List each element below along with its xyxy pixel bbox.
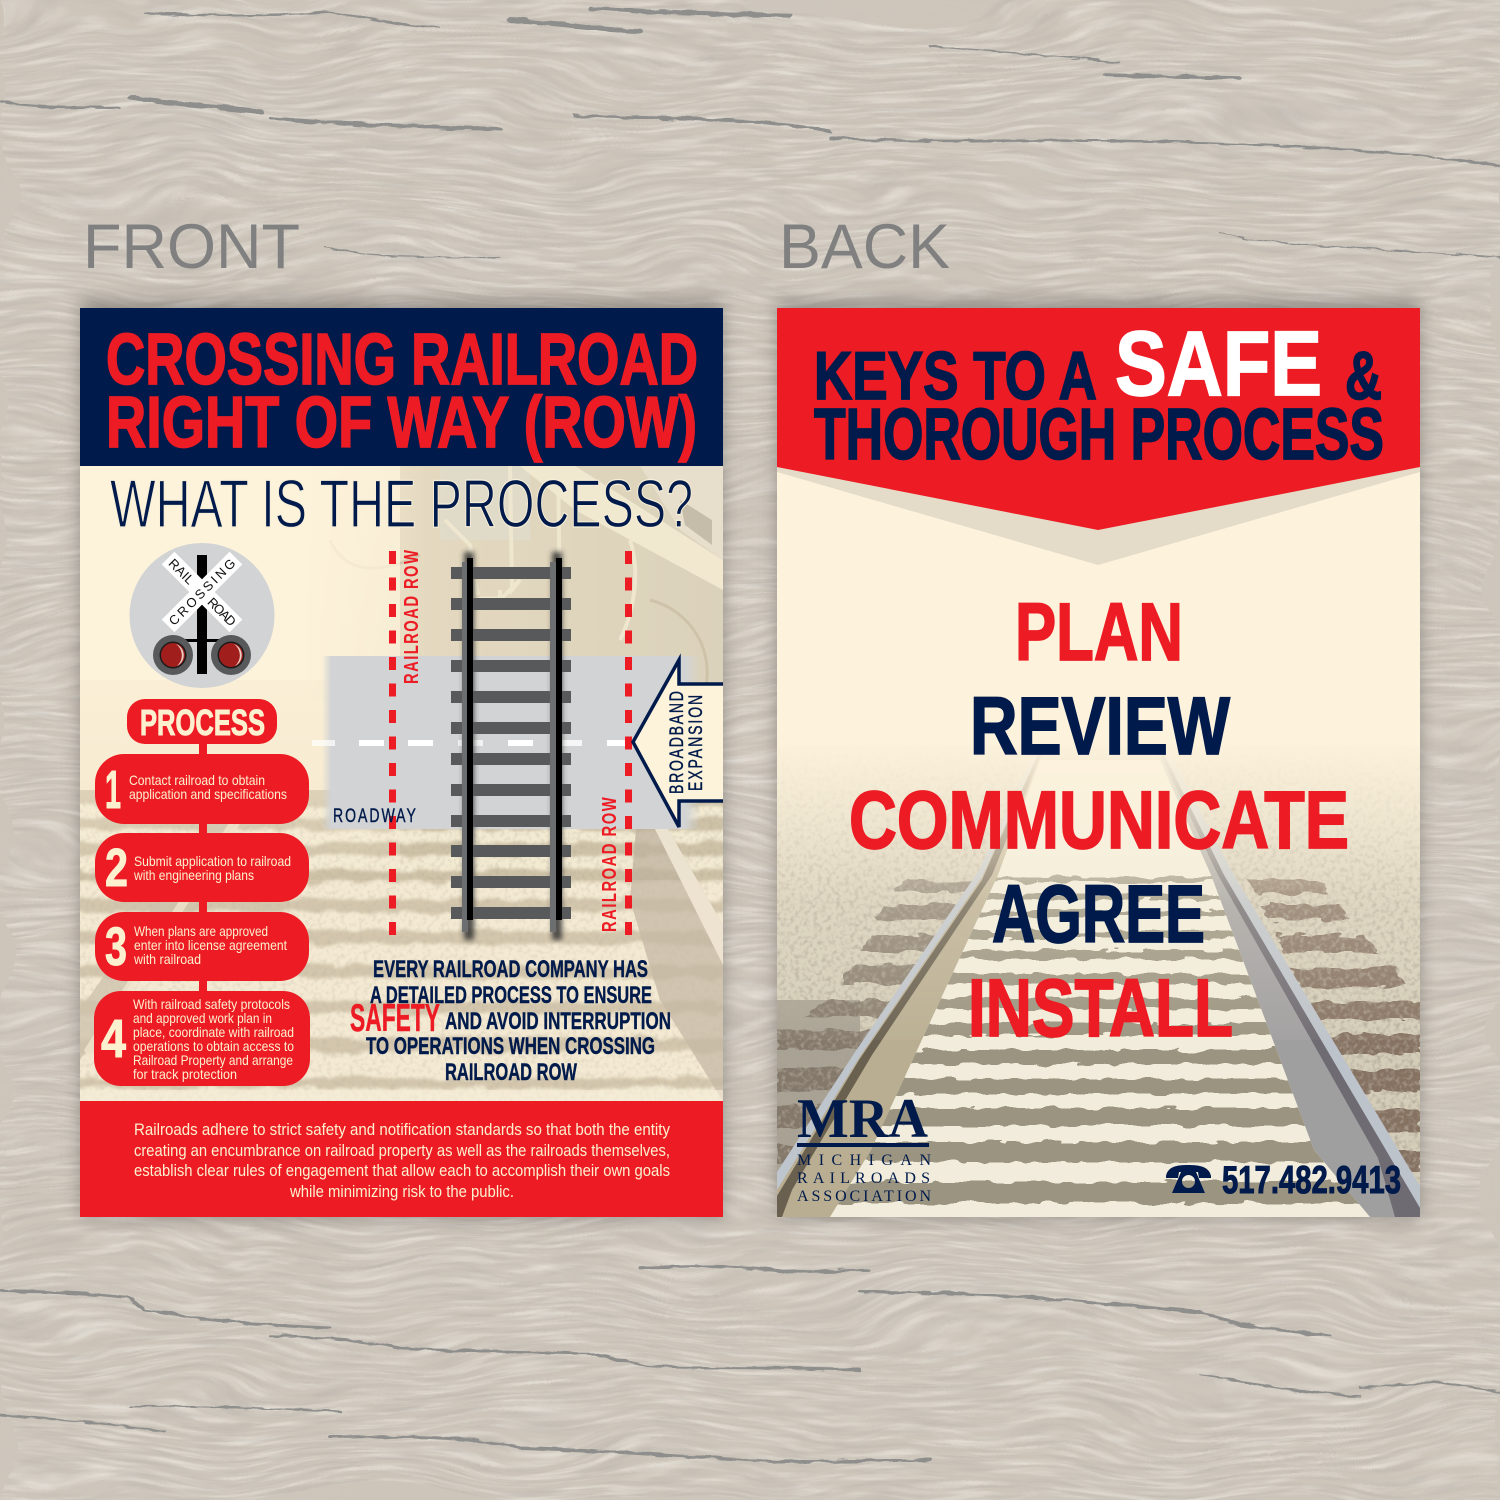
label: roadway: ROADWAY (333, 805, 416, 827)
step 3: enter into license agreement (134, 937, 287, 953)
rails (777, 750, 1420, 1217)
keyword list: PLAN (1015, 587, 1183, 678)
icon: railroad crossing sign: CROSSING (166, 556, 238, 628)
logo: Michigan Railroads Association: MICHIGAN (797, 1152, 931, 1169)
arrow: broadband expansion: BROADBAND (666, 691, 688, 794)
step 3: with railroad (133, 951, 201, 967)
process label (127, 699, 277, 744)
panel: back card (777, 308, 1430, 1230)
logo: Michigan Railroads Association: ASSOCIATION (797, 1188, 931, 1205)
process connector (199, 744, 207, 994)
text block: every railroad company (350, 956, 671, 1086)
label: FRONT: FRONT (83, 212, 300, 282)
step 1: 1 (105, 760, 121, 820)
text block: every railroad company: A DETAILED PROCESS TO ENSURE (370, 982, 652, 1009)
step 3: When plans are approved (134, 923, 268, 939)
arrow: broadband expansion (633, 660, 726, 827)
panel: front card (70, 308, 740, 1217)
roadway band (312, 656, 700, 829)
heading banner (777, 308, 1420, 530)
phone number: 517.482.9413 (1222, 1159, 1401, 1202)
keyword list: INSTALL (968, 963, 1233, 1054)
footer band: creating an encumbrance on railroad property as well as the railroads themselves, (134, 1141, 670, 1160)
icon: railroad crossing sign: ROAD (204, 594, 239, 629)
text block: every railroad company: EVERY RAILROAD COMPANY HAS (373, 956, 648, 983)
step 2: 2 (105, 838, 128, 898)
step 2: with engineering plans (133, 867, 254, 883)
subheading: WHAT IS THE PROCESS? (110, 466, 693, 542)
text block: every railroad company: SAFETY (350, 997, 440, 1040)
text block: every railroad company: AND AVOID INTERRUPTION (445, 1008, 671, 1035)
railroad track (451, 552, 571, 940)
keyword list: COMMUNICATE (849, 775, 1349, 866)
centre ballast (780, 745, 1420, 1225)
step 4: for track protection (133, 1066, 237, 1082)
step 4 (94, 991, 310, 1086)
outer ballast and sleepers (777, 750, 1430, 1230)
step 2 (95, 833, 309, 902)
process label: PROCESS (140, 702, 265, 743)
step 3 (95, 912, 309, 981)
keyword list: AGREE (992, 869, 1205, 960)
heading band: RIGHT OF WAY (ROW) (106, 383, 697, 463)
label: BACK: BACK (779, 212, 950, 282)
step 4: Railroad Property and arrange (133, 1052, 293, 1068)
step 1 (95, 754, 309, 824)
background photo: tracks (777, 308, 1430, 1230)
heading banner: & (1345, 338, 1382, 414)
heading band (80, 308, 723, 466)
text block: every railroad company: TO OPERATIONS WHEN CROSSING (366, 1033, 655, 1060)
logo: Michigan Railroads Association (797, 1088, 931, 1205)
footer band: while minimizing risk to the public. (289, 1182, 514, 1201)
step 1: application and specifications (129, 786, 287, 802)
footer band: establish clear rules of engagement that allow each to accomplish their own goals (134, 1161, 670, 1180)
label: railroad ROW right: RAILROAD ROW (598, 797, 621, 932)
icon: telephone (1166, 1165, 1211, 1193)
step 1: Contact railroad to obtain (129, 772, 265, 788)
background photo: train and track (80, 466, 723, 1101)
label: railroad ROW left: RAILROAD ROW (400, 550, 423, 684)
logo: Michigan Railroads Association: RAILROADS (797, 1170, 930, 1187)
keyword list: REVIEW (970, 681, 1230, 772)
step 3: 3 (105, 917, 127, 977)
logo: Michigan Railroads Association: MRA (797, 1088, 929, 1150)
icon: railroad crossing sign (130, 543, 274, 688)
heading band: CROSSING RAILROAD (106, 320, 698, 400)
text block: every railroad company: RAILROAD ROW (445, 1059, 577, 1086)
step 4: With railroad safety protocols (133, 996, 290, 1012)
heading banner: KEYS TO A (814, 338, 1097, 414)
railroad ROW dashed lines (392, 551, 628, 937)
step 2: Submit application to railroad (134, 853, 291, 869)
footer band: Railroads adhere to strict safety and notification standards so that both the entity (134, 1120, 670, 1139)
heading banner: SAFE (1115, 313, 1322, 415)
panel shadows (80, 300, 1420, 1218)
step 4: operations to obtain access to (133, 1038, 294, 1054)
step 4: place, coordinate with railroad (133, 1024, 294, 1040)
keyword list (849, 587, 1349, 1054)
step 4: and approved work plan in (133, 1010, 272, 1026)
banner shadow chevron (777, 460, 1420, 565)
step 4: 4 (101, 1009, 126, 1069)
footer band (80, 1101, 723, 1217)
arrow: broadband expansion: EXPANSION (685, 695, 707, 791)
icon: railroad crossing sign: RAIL (166, 556, 197, 587)
